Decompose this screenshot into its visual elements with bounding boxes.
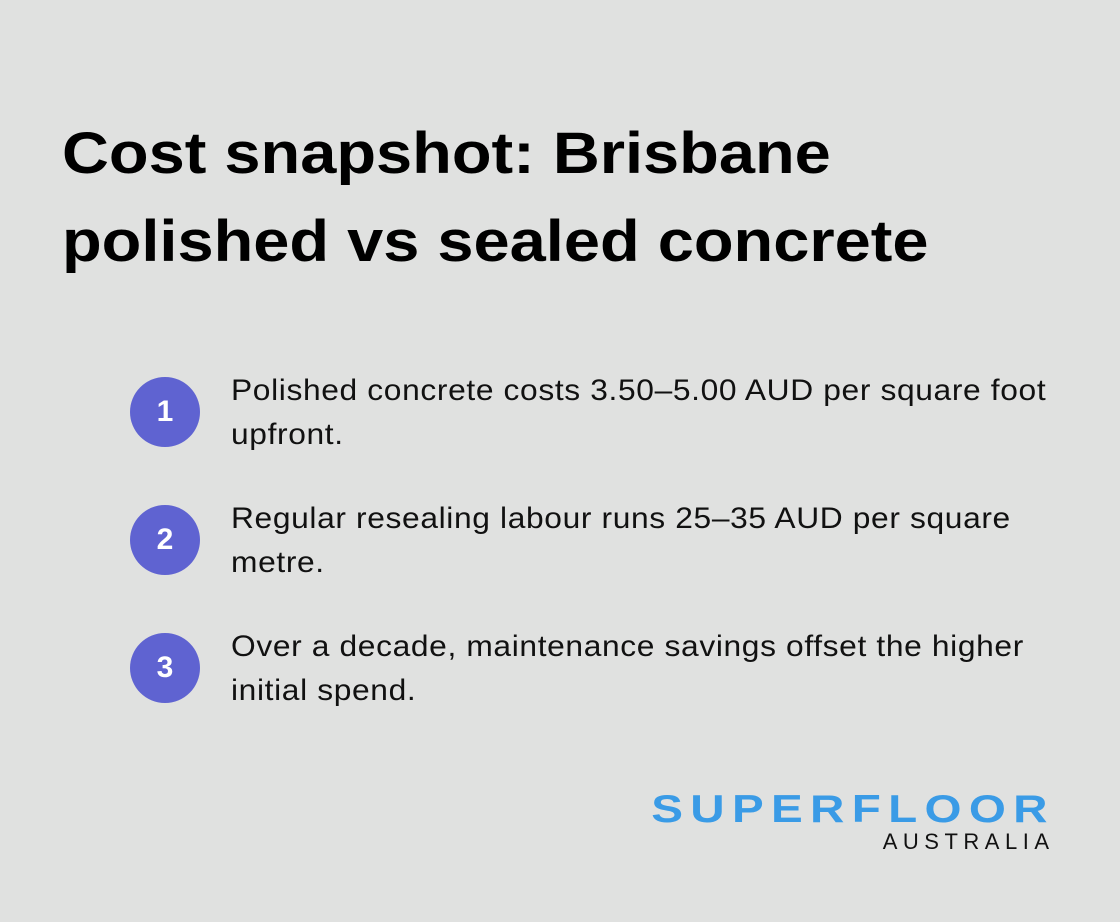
- text 3: Over a decade, maintenance savings offset the higher: [231, 630, 1024, 663]
- logo wordmark: SUPERFLOOR: [651, 788, 1055, 831]
- icon: number 2: 2: [157, 523, 173, 556]
- item 3: [130, 630, 1024, 707]
- text 1: [231, 374, 1046, 451]
- text 2: [231, 502, 1011, 579]
- item 1: [130, 374, 1046, 451]
- icon: number 3: [130, 633, 200, 703]
- text 2: Regular resealing labour runs 25–35 AUD per square: [231, 502, 1011, 535]
- logo subtitle: AUSTRALIA: [883, 829, 1054, 854]
- title: [62, 121, 928, 274]
- text 1: Polished concrete costs 3.50–5.00 AUD per square foot: [231, 374, 1046, 407]
- item 2: [130, 502, 1011, 579]
- icon: number 2: [130, 505, 200, 575]
- icon: number 1: 1: [157, 395, 173, 428]
- text 2: metre.: [231, 546, 325, 579]
- text 3: initial spend.: [231, 674, 416, 707]
- logo: [651, 788, 1055, 854]
- text 1: upfront.: [231, 418, 344, 451]
- icon: number 3: 3: [157, 651, 173, 684]
- title: Cost snapshot: Brisbane: [62, 121, 831, 186]
- title: polished vs sealed concrete: [62, 209, 928, 274]
- text 3: [231, 630, 1024, 707]
- icon: number 1: [130, 377, 200, 447]
